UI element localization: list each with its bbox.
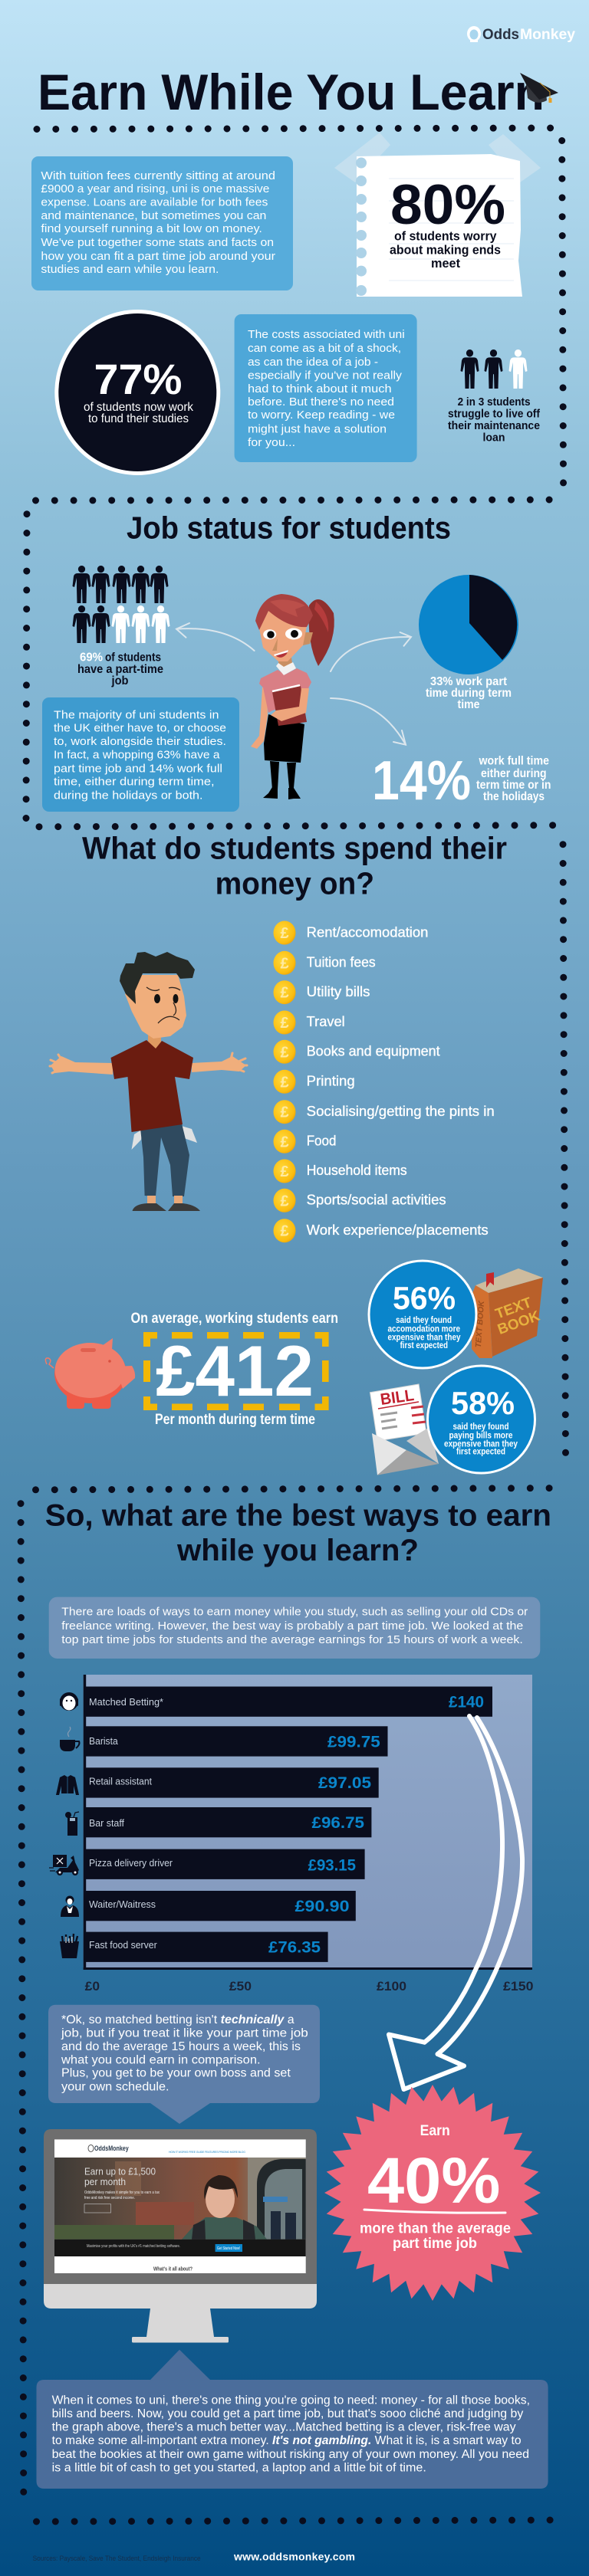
illustration: woman with book: [251, 594, 334, 799]
heading: spending: [82, 831, 507, 901]
item: Tuition fees: Tuition fees: [307, 955, 376, 970]
icon: jacket: [56, 1775, 79, 1795]
item: Food: [273, 1130, 336, 1153]
stat: 2 in 3 students: [448, 349, 541, 444]
illustration: man with empty pockets: [50, 952, 247, 1211]
item: Printing: Printing: [307, 1073, 355, 1088]
stat: £412 per month: On average, working students earn: [130, 1311, 338, 1327]
callout: closing text: the graph above, there's a much better way...Matched betting is a clever, risk-free way: [52, 2420, 516, 2433]
item: Household: £: [280, 1163, 289, 1180]
item: Food: Food: [307, 1133, 336, 1148]
pictogram: 69% part-time: of students: [105, 651, 161, 665]
item: Printing: £: [280, 1074, 289, 1091]
stat circle: 56%: accomodation more: [388, 1323, 460, 1334]
icon: bill and envelope: [370, 1384, 439, 1475]
panel: majority of students text: time, either during term time,: [54, 776, 215, 789]
panel: tuition fees intro: [31, 156, 293, 290]
bar: Bar staff: Bar staff: [89, 1817, 124, 1829]
callout: closing text: to make some all-important extra money. It's not gambling. What it is, is a smart way to: [52, 2434, 522, 2447]
bar: Fast food server: £76.35: [268, 1938, 321, 1956]
callout: matched betting note: [48, 2005, 320, 2124]
item: Tuition fees: £: [280, 955, 289, 972]
panel: 80% torn note: meet: [431, 256, 460, 271]
panel: majority of students text: part time job and 14% work full: [54, 762, 222, 775]
icon: waiter: [61, 1896, 79, 1917]
panel: 80% torn note: [334, 133, 541, 297]
footer: sources: Sources: Payscale, Save The Student, Endsleigh Insurance: [33, 2555, 201, 2562]
stat circle: 56%: [369, 1261, 476, 1368]
bar: Retail assistant: [86, 1767, 379, 1798]
stat circle: 58%: paying bills more: [449, 1430, 513, 1441]
stat: 14% full time: either during: [481, 767, 547, 780]
item: Sports: £: [280, 1193, 289, 1209]
pie chart: 33%: time: [457, 698, 480, 711]
axis labels: [85, 1980, 533, 1994]
item: Rent: [273, 921, 428, 944]
heading: spending: What do students spend their: [82, 831, 507, 866]
item: Books: [273, 1040, 440, 1064]
bar: Matched Betting: £140: [449, 1693, 484, 1711]
logo: OddsMonkey: Monkey: [520, 27, 575, 43]
item: Tuition fees: [273, 951, 376, 975]
stat: 2 in 3 students: struggle to live off: [448, 408, 541, 421]
stat circle: 77%: of students now work: [84, 401, 194, 414]
bar: Pizza delivery driver: £93.15: [308, 1857, 356, 1875]
panel: tuition fees intro: find yourself running a bit low on money.: [41, 222, 262, 235]
pictogram: 69% part-time: 69%: [80, 651, 103, 665]
item: Travel: £: [280, 1015, 289, 1032]
panel: costs text: [235, 314, 417, 462]
stat: £412 per month: [130, 1311, 338, 1428]
panel: costs text: had to think about it much: [248, 382, 392, 395]
bar: Waiter/Waitress: [86, 1891, 356, 1921]
stat circle: 77%: to fund their studies: [88, 412, 189, 425]
illustration: desktop monitor with website: Get Started Now!: [217, 2246, 240, 2251]
title: Earn While You Learn: [38, 64, 545, 120]
stat circle: 56%: said they found: [396, 1314, 452, 1325]
panel: tuition fees intro: We've put together some stats and facts on: [41, 236, 274, 249]
axis labels: £150: [503, 1980, 534, 1994]
stat: 2 in 3 students: loan: [483, 431, 505, 444]
stat: 14% full time: 14%: [372, 750, 471, 812]
panel: majority of students text: to, work alongside their studies.: [54, 735, 226, 748]
callout: matched betting note: your own schedule.: [61, 2080, 169, 2094]
icon: monkey: [60, 1692, 78, 1711]
stat: 14% full time: the holidays: [483, 790, 545, 803]
panel: costs text: especially if you've not really: [248, 369, 403, 382]
illustration: desktop monitor with website: OddsMonkey: [94, 2144, 129, 2153]
arrow: to 69%: [176, 623, 255, 651]
illustration: desktop monitor with website: What's it all about?: [153, 2267, 192, 2272]
item: Rent: Rent/accomodation: [307, 924, 428, 940]
item: Household: [273, 1159, 407, 1183]
starburst: earn 40% more: part time job: [393, 2236, 477, 2252]
panel: majority of students text: the UK either have to, or choose: [54, 722, 226, 735]
panel: tuition fees intro: studies and earn while you learn.: [41, 263, 219, 276]
pictogram: 69% part-time: job: [111, 674, 129, 687]
icon: coffee cup: [60, 1727, 80, 1751]
stat: £412 per month: £412: [156, 1331, 314, 1411]
icon: piggy bank: [45, 1338, 135, 1409]
item: Socialising: Socialising/getting the pints in: [307, 1104, 495, 1119]
icon: textbook: [472, 1268, 543, 1358]
logo: OddsMonkey: Odds: [482, 27, 519, 43]
axis labels: £0: [85, 1980, 100, 1994]
item: Rent: £: [280, 925, 289, 942]
item: Books: Books and equipment: [307, 1044, 440, 1059]
panel: costs text: for you...: [248, 436, 295, 449]
panel: majority of students text: In fact, a whopping 63% have a: [54, 748, 220, 761]
bar: Fast food server: Fast food server: [89, 1939, 157, 1951]
starburst: earn 40% more: Earn: [420, 2123, 450, 2139]
heading: spending: money on?: [216, 866, 374, 901]
stat circle: 56%: 56%: [393, 1280, 456, 1316]
panel: costs text: before. But there's no need: [248, 395, 394, 409]
bar: Matched Betting: [86, 1686, 492, 1717]
starburst: earn 40% more: more than the average: [360, 2221, 511, 2236]
icon: graduation cap: [520, 73, 558, 103]
callout: closing text: is a little bit of cash to get you started, a laptop and a little bit of time.: [52, 2462, 426, 2475]
panel: 80% torn note: 80%: [390, 174, 505, 236]
icon: glass: [65, 1812, 79, 1836]
item: Sports: Sports/social activities: [307, 1193, 446, 1208]
panel: ways to earn text: [49, 1597, 540, 1659]
pictogram: 69% part-time: [72, 566, 170, 687]
callout: matched betting note: Plus, you get to be your own boss and set: [61, 2067, 291, 2080]
illustration: desktop monitor with website: [44, 2129, 317, 2342]
bar: Bar staff: £96.75: [311, 1814, 364, 1832]
panel: majority of students text: during the holidays or both.: [54, 789, 202, 802]
stat: 2 in 3 students: their maintenance: [448, 419, 540, 432]
panel: majority of students text: [42, 697, 239, 812]
panel: ways to earn text: There are loads of ways to earn money while you study, such as selling your old CDs or: [61, 1606, 528, 1619]
item: Food: £: [280, 1134, 289, 1150]
item: Work experience: £: [280, 1223, 289, 1240]
item: Utility bills: [273, 980, 370, 1004]
bar: Pizza delivery driver: [86, 1849, 365, 1879]
bar chart: earnings by job: [84, 1675, 532, 1970]
arrow: to pie: [331, 632, 411, 671]
callout: matched betting note: *Ok, so matched betting isn't technically a: [61, 2013, 294, 2026]
panel: 80% torn note: about making ends: [390, 243, 501, 258]
panel: costs text: The costs associated with uni: [248, 328, 405, 341]
illustration: desktop monitor with website: free and risk free second income.: [84, 2196, 135, 2200]
icon: textbook: TEXT BOOK: [474, 1299, 486, 1348]
axis labels: £50: [229, 1980, 252, 1994]
axis labels: £100: [377, 1980, 406, 1994]
stat circle: 77%: [54, 310, 220, 475]
bar: Matched Betting: Matched Betting*: [89, 1696, 163, 1708]
item: Utility bills: £: [280, 985, 289, 1002]
panel: costs text: to worry. Keep reading - we: [248, 409, 395, 422]
illustration: desktop monitor with website: Earn up to £1,500: [84, 2165, 156, 2177]
panel: ways to earn text: top part time jobs for students and the average earnings for 15 hours of work a week.: [61, 1633, 523, 1646]
stat: £412 per month: Per month during term time: [155, 1412, 315, 1428]
bar: Barista: [86, 1726, 388, 1757]
illustration: desktop monitor with website: HOW IT WORKS FREE GUIDE FEATURES PRICING MORE BLOG: [169, 2151, 245, 2154]
stat circle: 58%: expensive than they: [444, 1438, 518, 1449]
panel: tuition fees intro: how you can fit a part time job around your: [41, 250, 275, 263]
pie chart: 33%: 33% work part: [430, 675, 507, 688]
stat: 14% full time: [372, 750, 551, 812]
item: Work experience: [273, 1219, 489, 1242]
heading: job status: Job status for students: [127, 510, 451, 546]
stat: 2 in 3 students: 2 in 3 students: [458, 395, 531, 409]
callout: matched betting note: what you could earn in comparison.: [61, 2053, 261, 2066]
item: Socialising: £: [280, 1104, 289, 1121]
item: Travel: [273, 1010, 345, 1035]
panel: tuition fees intro: expense. Loans are available for both fees: [41, 196, 268, 208]
bar: Waiter/Waitress: Waiter/Waitress: [89, 1898, 156, 1910]
stat circle: 58%: first expected: [456, 1446, 505, 1457]
callout: matched betting note: job, but if you treat it like your part time job: [61, 2027, 308, 2040]
footer: website: www.oddsmonkey.com: [233, 2551, 355, 2563]
item: Sports: [273, 1189, 446, 1213]
panel: costs text: might just have a solution: [248, 423, 387, 435]
logo: OddsMonkey: [467, 26, 575, 43]
panel: majority of students text: The majority of uni students in: [54, 708, 219, 721]
arrow: to 14%: [331, 698, 406, 745]
icon: bill and envelope: BILL: [379, 1386, 415, 1409]
stat circle: 77%: 77%: [94, 355, 183, 403]
heading: best ways: while you learn?: [176, 1534, 419, 1567]
panel: 80% torn note: of students worry: [394, 229, 497, 244]
icon: fries: [60, 1934, 79, 1958]
bar: Barista: £99.75: [327, 1734, 380, 1751]
bar: Fast food server: [86, 1932, 328, 1962]
callout: closing text: [37, 2350, 548, 2489]
illustration: desktop monitor with website: per month: [84, 2176, 126, 2187]
item: Books: £: [280, 1044, 289, 1061]
item: Work experience: Work experience/placements: [307, 1222, 489, 1238]
bar: Retail assistant: £97.05: [318, 1774, 371, 1792]
icon: textbook: BOOK: [495, 1308, 542, 1338]
panel: tuition fees intro: £9000 a year and rising, uni is one massive: [41, 182, 269, 195]
stat circle: 58%: [428, 1366, 535, 1473]
panel: tuition fees intro: and maintenance, but sometimes you can: [41, 209, 266, 222]
callout: closing text: When it comes to uni, there's one thing you're going to need: money - for all those books,: [52, 2394, 530, 2407]
stat circle: 56%: first expected: [400, 1340, 448, 1350]
panel: ways to earn text: freelance writing. However, the best way is probably a part time job. We looked at the: [61, 1619, 523, 1633]
panel: costs text: can come as a bit of a shock,: [248, 342, 401, 355]
pie chart: 33%: time during term: [426, 687, 512, 700]
starburst: earn 40% more: [324, 2085, 541, 2301]
list: spending categories: [273, 921, 495, 1242]
heading: best ways: So, what are the best ways to earn: [45, 1499, 551, 1533]
item: Travel: Travel: [307, 1014, 345, 1029]
arrow: hand-drawn to starburst: [389, 1716, 522, 2089]
item: Socialising: [273, 1100, 495, 1124]
stat: 14% full time: work full time: [479, 755, 549, 768]
item: Printing: [273, 1070, 355, 1094]
icon: textbook: TEXT: [493, 1295, 534, 1323]
item: Household: Household items: [307, 1163, 407, 1178]
pictogram: 69% part-time: have a part-time: [77, 663, 163, 676]
stat circle: 56%: expensive than they: [388, 1331, 461, 1342]
callout: closing text: beat the bookies at their own game without risking any of your own money. All you need: [52, 2448, 529, 2461]
icon: delivery scooter: [49, 1855, 79, 1875]
stat: 14% full time: term time or in: [476, 779, 551, 792]
callout: matched betting note: and do the average 15 hours a week, this is: [61, 2040, 301, 2053]
panel: tuition fees intro: With tuition fees currently sitting at around: [41, 169, 275, 182]
bar: Pizza delivery driver: Pizza delivery driver: [89, 1857, 173, 1869]
bar: Waiter/Waitress: £90.90: [294, 1898, 350, 1915]
item: Utility bills: Utility bills: [307, 984, 370, 999]
heading: best ways: [45, 1499, 551, 1567]
bar: Barista: Barista: [89, 1735, 118, 1747]
stat circle: 58%: said they found: [452, 1421, 509, 1432]
bar: Bar staff: [86, 1807, 371, 1837]
callout: closing text: bills and beers. Now, you could get a part time job, but that's sooo cliché and judging by: [52, 2407, 524, 2420]
bar: Retail assistant: Retail assistant: [89, 1776, 152, 1787]
starburst: earn 40% more: 40%: [367, 2144, 500, 2217]
illustration: desktop monitor with website: Maximise your profits with the UK's #1 matched betting software.: [87, 2244, 180, 2249]
illustration: desktop monitor with website: OddsMonkey makes it simple for you to earn a tax: [84, 2190, 160, 2195]
panel: costs text: as can the idea of a job -: [248, 356, 378, 369]
stat circle: 58%: 58%: [451, 1385, 515, 1421]
pie chart: 33%: [419, 575, 518, 711]
